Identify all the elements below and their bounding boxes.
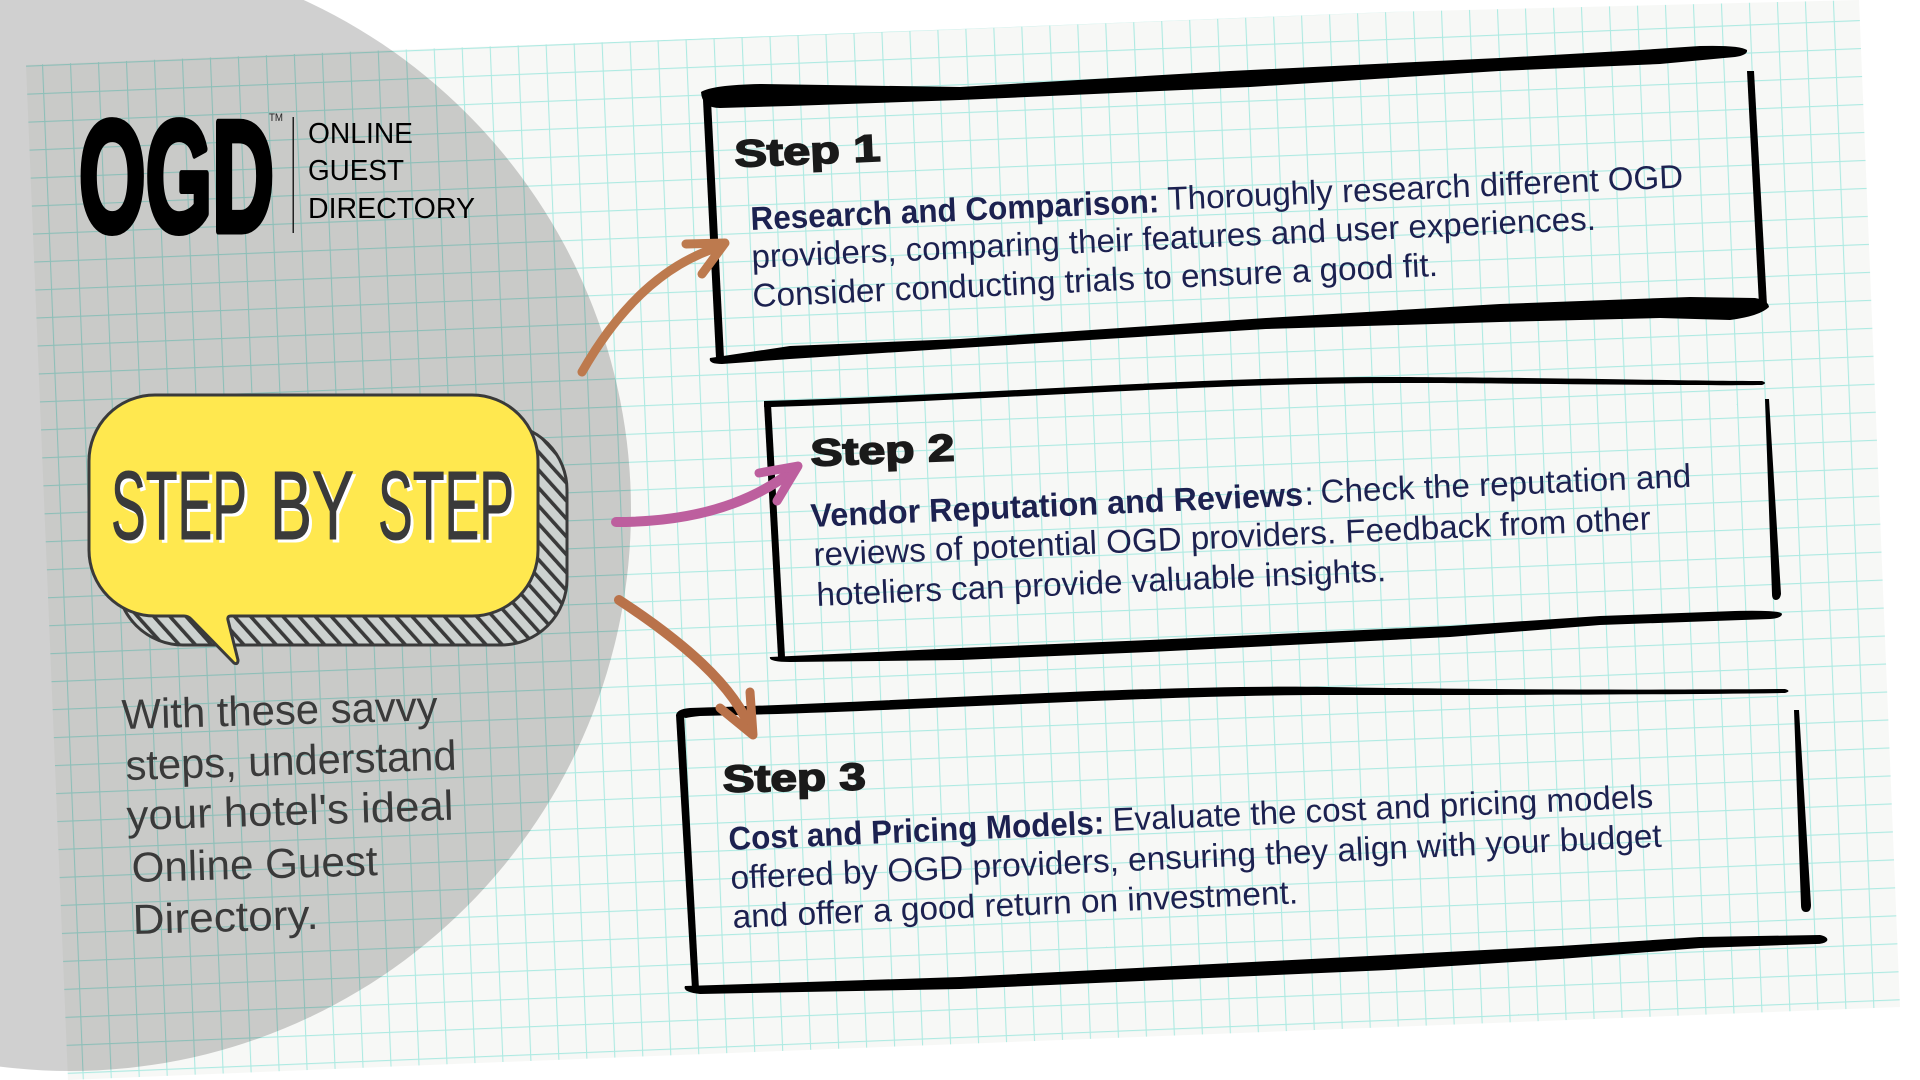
intro paragraph: With these savvy: [121, 682, 438, 738]
speech bubble: [89, 395, 567, 664]
bubble title: STEP: [378, 451, 514, 560]
step 2 text: reviews of potential OGD providers. Feedback from other: [813, 499, 1652, 573]
bubble body: [89, 395, 538, 664]
step 1 heading: Step 1: [734, 128, 881, 176]
bubble title: STEP: [114, 454, 250, 563]
bubble title: BY: [270, 451, 354, 560]
step 1 text: providers, comparing their features and user experiences.: [751, 200, 1596, 275]
step 2 text: hoteliers can provide valuable insights.: [816, 551, 1387, 613]
trademark: TM: [269, 112, 283, 124]
bubble title: [111, 451, 517, 563]
bubble title: BY: [273, 454, 357, 563]
intro paragraph: Directory.: [132, 891, 319, 943]
step 2 text: :: [1304, 475, 1314, 512]
step 2 text: [810, 457, 1692, 613]
panel: step 1: [701, 46, 1769, 364]
step 1 text: [750, 158, 1684, 314]
bubble hatched shadow: [117, 424, 567, 645]
intro paragraph: Online Guest: [131, 837, 378, 891]
logo wordmark: OGD: [79, 89, 274, 265]
intro paragraph: steps, understand: [125, 732, 457, 789]
step 2 heading: Step 2: [810, 427, 955, 475]
step 3 text: offered by OGD providers, ensuring they align with your budget: [730, 817, 1662, 896]
step 3 text: Evaluate the cost and pricing models: [1112, 777, 1654, 838]
step 1 text: Consider conducting trials to ensure a good fit.: [752, 246, 1439, 314]
step 3 heading: Step 3: [722, 757, 866, 801]
logo subtitle: GUEST: [308, 155, 404, 187]
arrow: to step 2: [616, 466, 798, 522]
step 3 hand-drawn frame: [676, 687, 1827, 994]
intro paragraph: your hotel's ideal: [126, 782, 454, 839]
logo subtitle: ONLINE: [308, 118, 413, 150]
step 3 text: [728, 777, 1662, 935]
logo subtitle: DIRECTORY: [308, 193, 475, 225]
logo: OGD: [79, 89, 475, 265]
panel: step 3: [676, 687, 1827, 994]
intro paragraph: [121, 682, 457, 943]
step 2 text: Check the reputation and: [1320, 457, 1692, 510]
bubble title: STEP: [111, 451, 247, 560]
logo divider: [292, 117, 294, 233]
bubble title: STEP: [381, 454, 517, 563]
logo subtitle: [308, 118, 475, 225]
step 1 hand-drawn frame: [701, 46, 1769, 364]
step 2 text: Vendor Reputation and Reviews: [810, 476, 1304, 534]
panel: step 2: [764, 377, 1782, 662]
step 3 text: Cost and Pricing Models:: [728, 804, 1105, 857]
step 2 hand-drawn frame: [764, 377, 1782, 662]
arrow: to step 3: [619, 600, 753, 735]
arrow: to step 1: [582, 243, 725, 372]
grey circle: [0, 0, 631, 1071]
step 1 text: Thoroughly research different OGD: [1167, 158, 1684, 217]
step 1 text: Research and Comparison:: [750, 182, 1160, 237]
step 3 text: and offer a good return on investment.: [732, 873, 1299, 935]
